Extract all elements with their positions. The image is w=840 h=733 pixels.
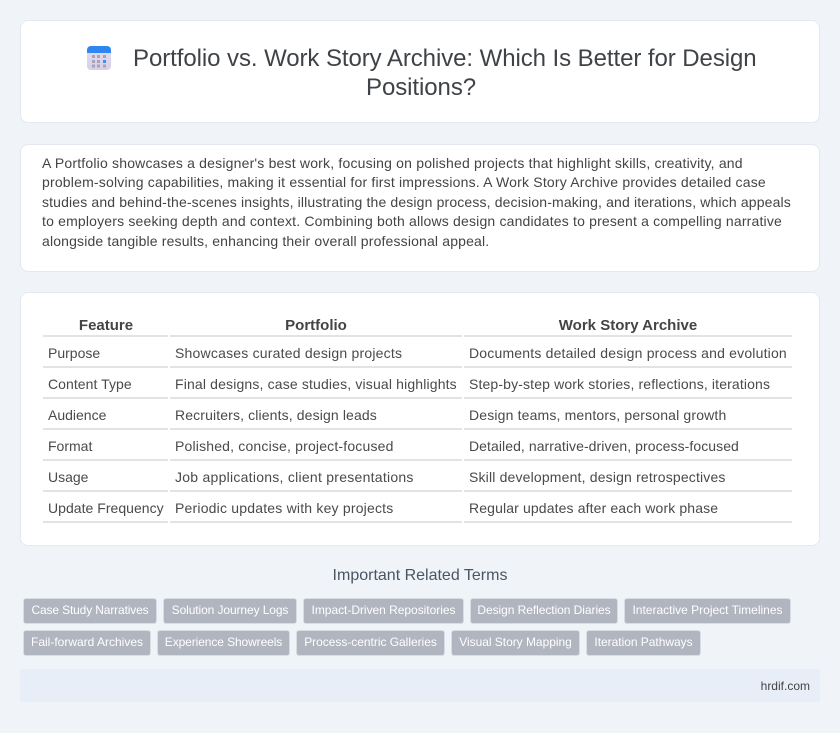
row: Purpose: Purpose bbox=[48, 345, 100, 361]
row: Update Frequency: Periodic updates with key projects bbox=[175, 500, 393, 516]
row: Audience bbox=[48, 407, 726, 423]
row: Audience: Recruiters, clients, design leads bbox=[175, 407, 377, 423]
footer bar bbox=[20, 669, 820, 702]
tag bbox=[451, 630, 580, 656]
intro text: alongside tangible results, enhancing their overall professional appeal. bbox=[42, 233, 489, 249]
tag: Experience Showreels bbox=[165, 635, 282, 649]
row: Audience: Audience bbox=[48, 407, 106, 423]
tag bbox=[163, 598, 297, 624]
tag: Design Reflection Diaries bbox=[477, 603, 611, 617]
row: Purpose: Documents detailed design process and evolution bbox=[469, 345, 787, 361]
row: Format: Polished, concise, project-focused bbox=[175, 438, 394, 454]
icon: calendar bbox=[87, 46, 111, 70]
intro panel bbox=[20, 144, 820, 272]
intro text: studies and behind-the-scenes insights, illustrating the design process, decision-making, and iterations, which appeals bbox=[42, 194, 791, 210]
row: Format bbox=[48, 438, 739, 454]
intro text: problem-solving capabilities, making it essential for first impressions. A Work Story Archive provides detailed case bbox=[42, 174, 766, 190]
intro text bbox=[42, 155, 791, 249]
tag: Solution Journey Logs bbox=[172, 603, 288, 617]
tag bbox=[586, 630, 701, 656]
tag bbox=[23, 630, 151, 656]
row: Content Type: Final designs, case studies, visual highlights bbox=[175, 376, 457, 392]
tag: Fail-forward Archives bbox=[31, 635, 143, 649]
row: Audience: Design teams, mentors, personal growth bbox=[469, 407, 726, 423]
tag: Visual Story Mapping bbox=[459, 635, 572, 649]
tag: Process-centric Galleries bbox=[304, 635, 437, 649]
tag: Iteration Pathways bbox=[594, 635, 693, 649]
related terms tags bbox=[23, 598, 791, 656]
tag: Impact-Driven Repositories bbox=[312, 603, 455, 617]
column header: Feature: Feature bbox=[79, 317, 133, 334]
tag bbox=[157, 630, 290, 656]
column header: Portfolio: Portfolio bbox=[285, 317, 347, 334]
row: Usage: Usage bbox=[48, 469, 88, 485]
title bbox=[133, 45, 757, 101]
row: Update Frequency bbox=[48, 500, 718, 516]
row: Content Type: Content Type bbox=[48, 376, 132, 392]
row: Content Type: Step-by-step work stories, reflections, iterations bbox=[469, 376, 770, 392]
tag bbox=[624, 598, 791, 624]
title: Portfolio vs. Work Story Archive: Which Is Better for Design bbox=[133, 45, 757, 72]
tag bbox=[303, 598, 464, 624]
intro text: to employers seeking depth and context. Combining both allows design candidates to present a compelling narrative bbox=[42, 213, 782, 229]
row: Purpose: Showcases curated design projects bbox=[175, 345, 402, 361]
comparison table bbox=[43, 317, 792, 523]
title: Positions? bbox=[366, 74, 476, 101]
tag: Case Study Narratives bbox=[31, 603, 149, 617]
footer source text: hrdif.com bbox=[761, 679, 810, 693]
tag bbox=[23, 598, 157, 624]
tag: Interactive Project Timelines bbox=[632, 603, 783, 617]
intro text: A Portfolio showcases a designer's best work, focusing on polished projects that highlight skills, creativity, and bbox=[42, 155, 743, 171]
column header: Work Story Archive: Work Story Archive bbox=[559, 317, 697, 334]
row: Usage: Job applications, client presentations bbox=[175, 469, 414, 485]
row: Content Type bbox=[48, 376, 770, 392]
tag bbox=[296, 630, 445, 656]
row: Update Frequency: Update Frequency bbox=[48, 500, 164, 516]
row: Usage: Skill development, design retrospectives bbox=[469, 469, 726, 485]
row: Update Frequency: Regular updates after each work phase bbox=[469, 500, 718, 516]
row: Purpose bbox=[48, 345, 787, 361]
tag bbox=[470, 598, 618, 624]
related terms heading: Important Related Terms bbox=[333, 567, 507, 584]
row: Format: Detailed, narrative-driven, process-focused bbox=[469, 438, 739, 454]
row: Usage bbox=[48, 469, 726, 485]
comparison table panel bbox=[20, 292, 820, 546]
row: Format: Format bbox=[48, 438, 92, 454]
header card bbox=[20, 20, 820, 123]
